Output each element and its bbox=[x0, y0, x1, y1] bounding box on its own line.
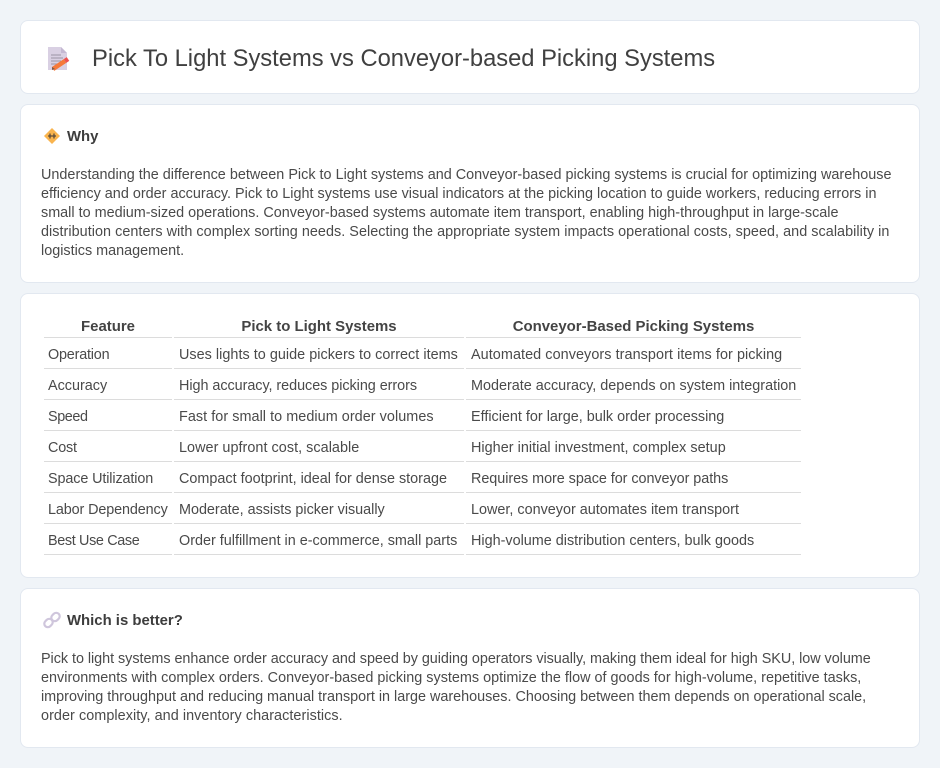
text block: why: small to medium-sized operations. Conveyor-based systems automate item transport, enabling high-throughput in large-scale bbox=[41, 205, 838, 221]
comparison table: High accuracy, reduces picking errors bbox=[179, 378, 417, 394]
icon: link bbox=[43, 612, 61, 628]
text block: why: Understanding the difference between Pick to Light systems and Conveyor-based picking systems is crucial for optimizing warehouse bbox=[41, 167, 892, 183]
panel: comparison table bbox=[20, 293, 920, 578]
comparison table: Moderate, assists picker visually bbox=[179, 502, 385, 518]
text block: why: distribution centers with complex sorting needs. Selecting the appropriate system impacts operational costs, speed, and scalability in bbox=[41, 224, 889, 240]
comparison table: Space Utilization bbox=[48, 471, 153, 487]
text block: why: logistics management. bbox=[41, 243, 184, 259]
comparison table bbox=[44, 318, 801, 555]
panel: title bbox=[20, 20, 920, 94]
title text: Pick To Light Systems vs Conveyor-based Picking Systems bbox=[92, 46, 715, 72]
comparison table: Higher initial investment, complex setup bbox=[471, 440, 726, 456]
comparison table: Requires more space for conveyor paths bbox=[471, 471, 728, 487]
comparison table: Order fulfillment in e-commerce, small parts bbox=[179, 533, 457, 549]
comparison table: Lower, conveyor automates item transport bbox=[471, 502, 739, 518]
comparison table: Cost bbox=[48, 440, 77, 456]
comparison table: Labor Dependency bbox=[48, 502, 168, 518]
text block: which is better: Pick to light systems enhance order accuracy and speed by guiding operators visually, making them ideal for high SKU, low volume bbox=[41, 651, 871, 667]
header: conveyor: Conveyor-Based Picking Systems bbox=[513, 318, 754, 335]
header: feature: Feature bbox=[81, 318, 135, 335]
heading: which is better: Which is better? bbox=[67, 613, 183, 629]
comparison table: Automated conveyors transport items for picking bbox=[471, 347, 782, 363]
heading: why: Why bbox=[67, 129, 98, 145]
text block: why bbox=[41, 167, 892, 259]
icon: warning diamond bbox=[44, 128, 60, 144]
header: pick to light: Pick to Light Systems bbox=[241, 318, 397, 335]
comparison table: High-volume distribution centers, bulk goods bbox=[471, 533, 754, 549]
comparison table: Lower upfront cost, scalable bbox=[179, 440, 359, 456]
icon: document with pencil bbox=[48, 47, 70, 71]
panel: why bbox=[20, 104, 920, 283]
comparison table: Accuracy bbox=[48, 378, 107, 394]
comparison table: Efficient for large, bulk order processing bbox=[471, 409, 724, 425]
comparison table: Compact footprint, ideal for dense storage bbox=[179, 471, 447, 487]
panel: which is better bbox=[20, 588, 920, 748]
text block: which is better: environments with complex orders. Conveyor-based picking systems optimize the flow of goods for high-volume, repetitive tasks, bbox=[41, 670, 861, 686]
comparison table: Moderate accuracy, depends on system integration bbox=[471, 378, 796, 394]
comparison table: Operation bbox=[48, 347, 109, 363]
comparison table: Speed bbox=[48, 409, 88, 425]
comparison table: Best Use Case bbox=[48, 533, 139, 549]
comparison table: Uses lights to guide pickers to correct items bbox=[179, 347, 458, 363]
text block: which is better bbox=[41, 651, 871, 724]
comparison table: Fast for small to medium order volumes bbox=[179, 409, 434, 425]
text block: which is better: improving throughput and reducing manual transport in large warehouses. Choosing between them depends on operational scale, bbox=[41, 689, 866, 705]
text block: which is better: order complexity, and inventory characteristics. bbox=[41, 708, 343, 724]
text block: why: efficiency and order accuracy. Pick to Light systems use visual indicators at the picking location to guide workers, reducing errors in bbox=[41, 186, 876, 202]
